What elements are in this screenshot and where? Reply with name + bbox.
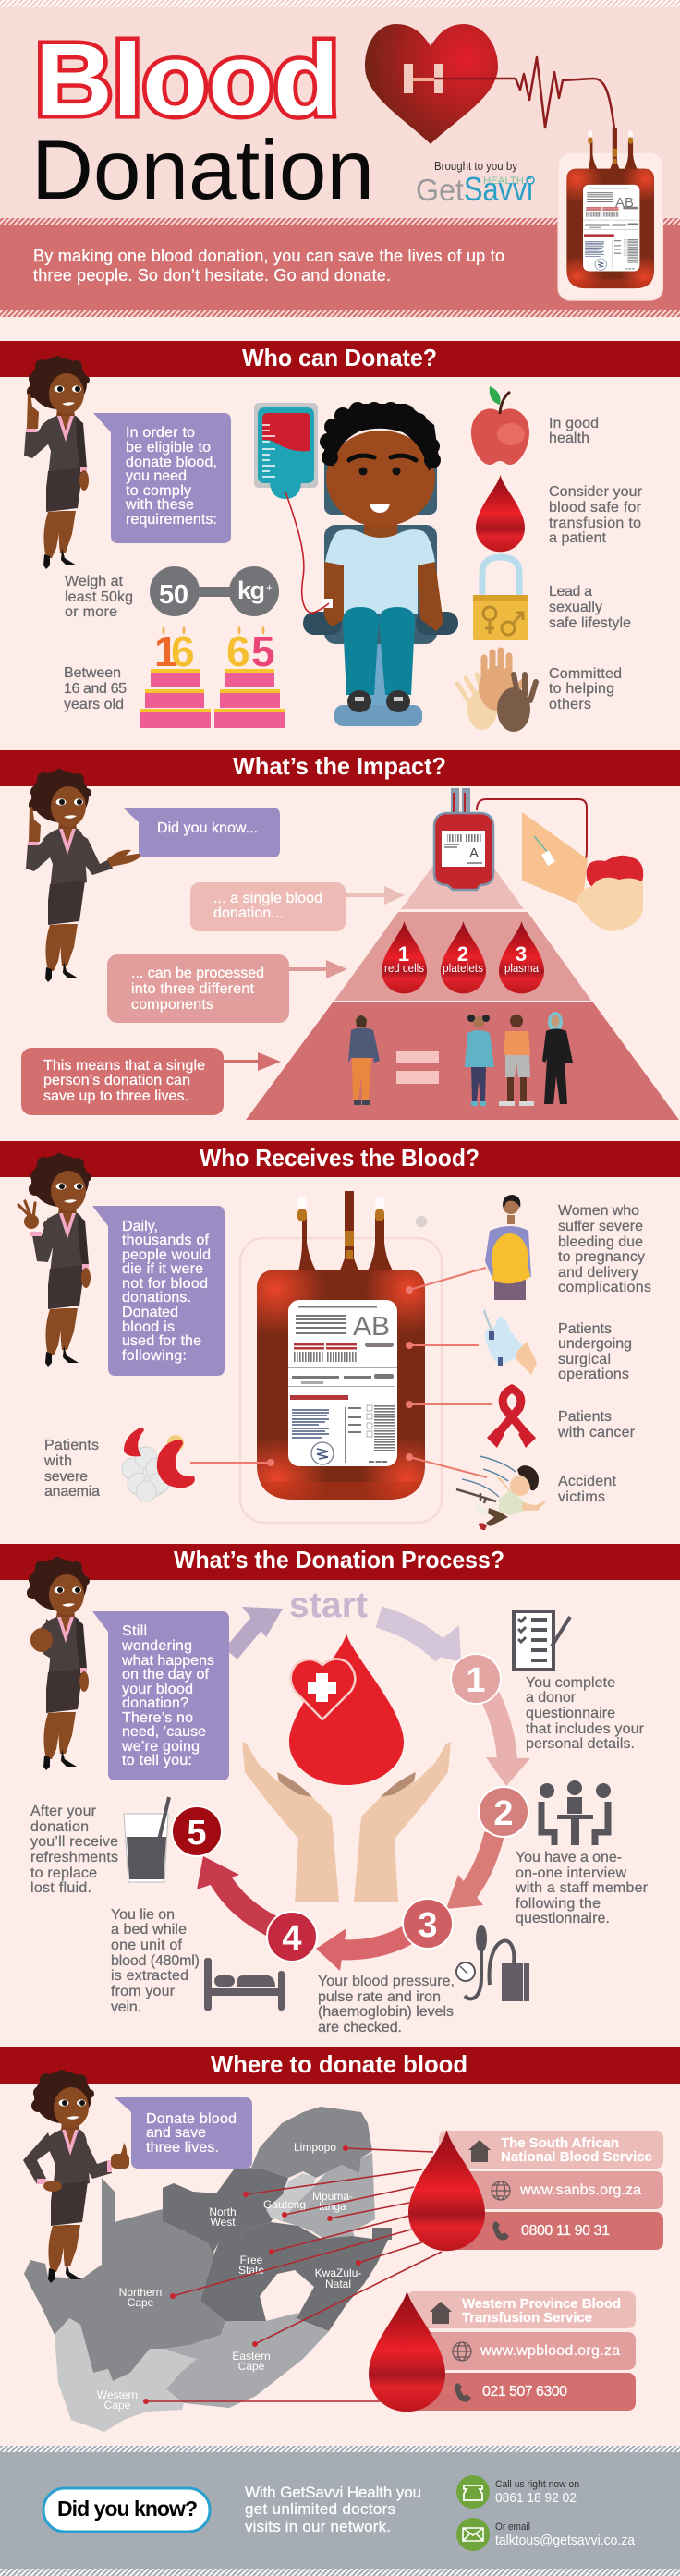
region labels: Cape (104, 2399, 131, 2412)
icon: cancer ribbon (487, 1389, 536, 1448)
text: You have a one- (516, 1850, 622, 1865)
step 4: 4 (282, 1919, 302, 1958)
speech bubble: There’s no (122, 1710, 193, 1726)
text (318, 1974, 455, 2035)
speech bubble: what happens (121, 1653, 214, 1669)
section: where to donate blood (0, 2047, 680, 2432)
arm and hand squeezing heart (522, 812, 643, 931)
text: pregnancy: bleeding due (558, 1234, 643, 1250)
footer message: visits in our network. (245, 2518, 391, 2535)
text: anaemia (43, 1438, 100, 1500)
header panel (0, 0, 680, 317)
callout: three components: components (131, 997, 213, 1013)
step 2: 2 (493, 1794, 514, 1833)
blood bag type A (434, 788, 587, 890)
step 3: 3 (418, 1906, 438, 1945)
service name: The South African (501, 2135, 619, 2151)
text: questionnaire (526, 1706, 615, 1721)
drop: red cells: 1 (398, 942, 409, 966)
drop: red cells: red cells (384, 961, 424, 975)
icon: interview (540, 1780, 611, 1845)
text: weight requirement: least 50kg (65, 589, 133, 605)
step 5: 5 (187, 1814, 207, 1853)
text: refreshments (30, 1850, 118, 1865)
seated donor (285, 402, 458, 726)
region labels: Northern (119, 2286, 162, 2299)
footer message (245, 2484, 421, 2535)
component drops (382, 921, 544, 993)
speech bubble: donate blood, (126, 455, 217, 470)
text: from your (111, 1984, 176, 1999)
text: pregnancy: and delivery (558, 1265, 638, 1281)
speech bubble: Still (122, 1623, 147, 1639)
presenter character making OK sign (18, 1153, 91, 1367)
speech bubble: following: (122, 1348, 187, 1364)
icon: globe (492, 2181, 510, 2200)
text: accident: victims (558, 1489, 605, 1505)
heading banner (0, 1544, 680, 1580)
arrow: to step 5 (197, 1856, 273, 1926)
speech bubble (92, 1206, 225, 1376)
drop: platelets (441, 921, 486, 993)
footer message: With GetSavvi Health you (245, 2484, 421, 2501)
heading banner: What’s the Impact? (233, 752, 446, 780)
contact: phone (456, 2475, 579, 2509)
central blood drop with heart (289, 1634, 404, 1785)
footer panel (0, 2446, 680, 2576)
presenter character with open hand (26, 769, 143, 982)
text: you’ll receive (30, 1834, 118, 1850)
connector lines (190, 1268, 492, 1477)
blood bag illustration: AB (615, 195, 634, 211)
speech bubble: and save (146, 2125, 206, 2141)
blood bag illustration (550, 128, 669, 300)
text: helping others (549, 666, 622, 712)
service name: Western Province Blood (462, 2296, 621, 2312)
icon: dumbbell 50 kg: kg (237, 577, 265, 604)
speech bubble: used for the (122, 1333, 201, 1349)
region: Northern Cape (24, 2178, 225, 2381)
text: safe lifestyle (549, 584, 631, 631)
arrow: to step 2 (486, 1695, 530, 1786)
speech bubble: to comply (126, 483, 191, 499)
drop: plasma: plasma (504, 961, 540, 975)
three recipient figures (465, 1012, 573, 1106)
text: pulse rate and iron (318, 1989, 441, 2005)
region labels: Cape (128, 2296, 154, 2309)
region labels: State (238, 2264, 264, 2277)
icon: birthday cakes 16 and 65: 6 (171, 627, 195, 675)
drop: red cells (382, 921, 427, 993)
region labels: Free (240, 2254, 263, 2266)
region labels: Limpopo (294, 2141, 336, 2154)
text: age requirement (64, 665, 127, 712)
icon: birthday cakes 16 and 65: 1 (154, 627, 178, 675)
drop: plasma: 3 (516, 942, 527, 966)
step 2 (479, 1780, 649, 1926)
blood drop: WP (369, 2290, 445, 2412)
sponsor logo: Brought to you by (434, 159, 517, 173)
speech bubble: people would (122, 1247, 211, 1263)
region labels: Natal (325, 2278, 351, 2290)
callout: three lives: save up to three lives. (43, 1088, 188, 1104)
icon: dumbbell 50 kg: 50 (159, 580, 188, 610)
text: safe lifestyle: Lead a (549, 584, 592, 600)
contact: email: Or email (495, 2521, 530, 2533)
speech bubble: thousands of (122, 1233, 210, 1248)
callout: three lives: This means that a single (43, 1058, 205, 1074)
region labels: Western (97, 2388, 138, 2401)
icon: phone (455, 2383, 471, 2402)
intro text (33, 247, 504, 285)
region labels: langa (319, 2200, 346, 2213)
text: pregnancy: Women who (558, 1203, 639, 1219)
icon: dumbbell 50 kg: + (266, 581, 273, 594)
text: with a staff member (515, 1880, 649, 1896)
arrow: to step 3 (446, 1834, 494, 1909)
region labels: Eastern (232, 2350, 271, 2363)
speech bubble: wondering (121, 1638, 192, 1654)
step 1 (451, 1611, 645, 1752)
icon: checklist (514, 1611, 570, 1670)
icon: globe (453, 2342, 471, 2361)
contact: phone: 0861 18 92 02 (495, 2490, 577, 2506)
text: age requirement: Between (64, 665, 121, 681)
text: safe blood: Consider your (549, 484, 643, 500)
arrow: to step 4 (316, 1928, 411, 1971)
start label: start (289, 1586, 368, 1625)
text: are checked. (318, 2020, 402, 2035)
icon: apple (471, 386, 529, 465)
speech bubble: not for blood (122, 1276, 208, 1292)
text: a bed while (111, 1922, 187, 1938)
callout: single donation: ... a single blood (213, 891, 322, 906)
contact: phone: Call us right now on (495, 2479, 579, 2490)
region: Mpumalanga (282, 2153, 375, 2238)
text: following the (516, 1896, 601, 1912)
callout: single donation: donation... (213, 905, 284, 921)
speech bubble: need, ’cause (122, 1724, 206, 1740)
text (526, 1675, 645, 1752)
icon: birthday cakes 16 and 65: 5 (251, 627, 275, 675)
text: vein. (111, 1999, 141, 2015)
text: pregnancy: complications (558, 1280, 651, 1295)
text: a donor (526, 1690, 577, 1706)
heading banner: What’s the Donation Process? (174, 1546, 504, 1574)
icon: helping hands (457, 650, 536, 732)
speech bubble: three lives. (146, 2140, 219, 2156)
icon: bed (204, 1958, 285, 2011)
text: surgery: surgical (558, 1352, 611, 1367)
speech bubble: Donated (122, 1305, 178, 1320)
region: KwaZulu-Natal (295, 2236, 388, 2331)
region: Swaziland (372, 2228, 392, 2240)
text: that includes your (526, 1721, 645, 1737)
speech bubble (93, 413, 231, 543)
callout: three components (107, 954, 347, 1023)
speech bubble: with these (125, 497, 194, 513)
text: weight requirement (65, 574, 133, 620)
icon: falling accident victim (456, 1456, 545, 1530)
callout: three components: into three different (131, 981, 255, 997)
service name (462, 2296, 621, 2326)
contact: email (456, 2518, 636, 2551)
phone number: 021 507 6300 (482, 2384, 567, 2400)
heading banner (0, 750, 680, 786)
text: age requirement: 16 and 65 (64, 681, 127, 697)
text: pregnancy: suffer severe (558, 1219, 643, 1234)
speech bubble: be eligible to (126, 440, 211, 456)
heading banner: Who Receives the Blood? (200, 1144, 480, 1172)
text: After your (30, 1804, 97, 1819)
icon: glass of water (124, 1797, 169, 1882)
text: in good health: In good (549, 416, 599, 431)
step 4 (111, 1907, 317, 2015)
speech bubble (115, 2097, 252, 2169)
did you know pill: Did you know? (57, 2497, 198, 2521)
text: in good health (549, 416, 599, 446)
blood drop: SANBS (408, 2130, 485, 2251)
region labels: KwaZulu- (315, 2266, 361, 2279)
icon: surgical glove with scalpel (484, 1310, 537, 1375)
text: age requirement: years old (64, 697, 124, 712)
text: Your blood pressure, (318, 1974, 455, 1989)
callout: three lives (21, 1048, 281, 1115)
text: safe blood: transfusion to (549, 516, 641, 531)
section: what's the impact (0, 750, 680, 1120)
presenter character with thumbs up (23, 2070, 129, 2283)
heading banner (0, 1141, 680, 1177)
text: pregnancy: to pregnancy (558, 1249, 645, 1265)
title: Blood: Blood (35, 23, 339, 137)
text (30, 1804, 118, 1896)
text: cancer (557, 1409, 636, 1440)
icon: padlock with gender symbols (473, 557, 528, 640)
sponsor logo: Get (416, 173, 464, 207)
speech bubble: donation? (122, 1695, 188, 1711)
text: personal details. (526, 1736, 635, 1752)
text: lost fluid. (30, 1880, 91, 1896)
text: anaemia: severe (44, 1469, 88, 1485)
text: helping others: Committed (549, 666, 622, 682)
text: questionnaire. (516, 1911, 610, 1926)
speech bubble: we’re going (121, 1739, 200, 1755)
callout: three components: ... can be processed (131, 966, 264, 981)
presenter character pointing forward (27, 1557, 90, 1770)
equals sign (396, 1051, 439, 1084)
section: who can donate (0, 341, 680, 732)
requirement list right (457, 386, 643, 732)
speech bubble: requirements: (126, 512, 217, 528)
text: helping others: to helping (549, 681, 614, 697)
text: anaemia: Patients (44, 1438, 99, 1453)
text: (haemoglobin) levels (318, 2004, 454, 2020)
section: donation process (0, 1544, 680, 2035)
text (515, 1850, 649, 1926)
text: safe lifestyle: safe lifestyle (549, 615, 631, 631)
icon: pregnant woman (485, 1195, 531, 1300)
text: to replace (30, 1865, 97, 1881)
step 5 (30, 1797, 222, 1896)
icon: dumbbell 50 kg (150, 566, 279, 616)
region: Limpopo (232, 2107, 372, 2178)
text: anaemia: anaemia (44, 1484, 100, 1500)
process arrows (197, 1607, 530, 1971)
drop: plasma (499, 921, 544, 993)
speech bubble: Did you know... (157, 820, 258, 836)
icon: blood drop (476, 475, 525, 552)
region labels: North (209, 2205, 237, 2218)
heading banner: Where to donate blood (211, 2050, 468, 2078)
text: safe blood: blood safe for (549, 500, 642, 516)
speech bubble: Daily, (122, 1219, 158, 1234)
arrow: start (231, 1607, 283, 1654)
region: North West (163, 2169, 288, 2254)
blood bag type A: A (469, 845, 479, 861)
region: Gauteng (266, 2173, 316, 2221)
service name: National Blood Service (501, 2149, 652, 2165)
text: pregnancy (558, 1203, 651, 1295)
text: blood (480ml) (111, 1953, 200, 1969)
section: who receives the blood (0, 1141, 680, 1530)
service contact card: SANBS (439, 2131, 663, 2250)
callout: single donation (190, 882, 405, 931)
large blood bag with label: AB (353, 1312, 390, 1342)
text: You lie on (111, 1907, 175, 1923)
did you know pill (43, 2488, 210, 2532)
one donor figure (348, 1015, 380, 1105)
drop: platelets: platelets (443, 961, 483, 975)
text: weight requirement: Weigh at (65, 574, 124, 589)
region: Eastern Cape (164, 2313, 329, 2408)
text: surgery: undergoing (558, 1336, 632, 1352)
title: Donation: Donation (31, 124, 374, 217)
intro text: By making one blood donation, you can save the lives of up to (33, 247, 504, 265)
text: helping others: others (549, 697, 591, 712)
text: surgery (558, 1321, 632, 1382)
icon: house (468, 2140, 491, 2162)
website: www.wpblood.org.za (480, 2343, 620, 2359)
sponsor logo: Savvi (464, 170, 533, 208)
speech bubble: donations. (122, 1290, 191, 1306)
text: is extracted (111, 1968, 188, 1984)
footer message: get unlimited doctors (245, 2500, 395, 2518)
speech bubble: you need (126, 468, 187, 484)
speech bubble (92, 1611, 229, 1780)
text: cancer: with cancer (557, 1425, 636, 1440)
text: surgery: Patients (558, 1321, 612, 1337)
region: Western Cape (55, 2318, 197, 2432)
phone number: 0800 11 90 31 (521, 2223, 610, 2239)
icon: birthday cakes 16 and 65: 6 (226, 627, 250, 675)
text: surgery: operations (558, 1367, 629, 1382)
region labels: Mpuma- (312, 2190, 353, 2203)
region: Free State (200, 2222, 322, 2321)
speech bubble: your blood (122, 1682, 193, 1697)
heading banner: Who can Donate? (242, 344, 437, 371)
text: You complete (526, 1675, 615, 1691)
large blood bag with label (225, 1191, 453, 1523)
contact: email: talktous@getsavvi.co.za (495, 2533, 636, 2548)
icon: house (430, 2302, 452, 2324)
service name (501, 2135, 652, 2165)
arrow: to step 1 (379, 1617, 461, 1662)
speech bubble: to tell you: (122, 1753, 192, 1768)
presenter character pointing up (24, 356, 90, 569)
heading banner (0, 341, 680, 377)
pyramid (246, 825, 679, 1120)
callout: three lives: person’s donation can (43, 1073, 190, 1088)
region labels: Gauteng (263, 2198, 306, 2211)
icon: phone (492, 2221, 509, 2241)
map connector lines (143, 2145, 442, 2404)
text (111, 1907, 200, 2015)
text: on-one interview (516, 1865, 626, 1881)
map of South Africa (24, 2107, 392, 2432)
icon: blood pressure cuff (456, 1925, 529, 2001)
speech bubble: on the day of (122, 1667, 210, 1683)
text: accident (558, 1474, 617, 1505)
text: accident: Accident (558, 1474, 617, 1489)
IV blood bag (254, 403, 318, 499)
text: in good health: health (549, 431, 589, 446)
intro text: three people. So don’t hesitate. Go and donate. (33, 266, 391, 285)
website: www.sanbs.org.za (519, 2182, 641, 2198)
speech bubble: In order to (126, 425, 195, 441)
text: donation (30, 1819, 89, 1835)
region labels (97, 2141, 361, 2412)
text: safe lifestyle: sexually (549, 600, 602, 615)
sponsor logo: HEALTH (483, 176, 524, 187)
speech bubble (123, 808, 280, 857)
cupped hands (242, 1742, 451, 1902)
service contact card: WP blood (407, 2291, 636, 2411)
step 3 (318, 1899, 529, 2035)
text: safe blood (549, 484, 643, 546)
service name: Transfusion Service (462, 2310, 592, 2326)
icon: blood cells anaemia (122, 1428, 195, 1501)
text: safe blood: a patient (549, 530, 607, 546)
text: one unit of (111, 1938, 183, 1953)
region labels: West (210, 2216, 236, 2229)
speech bubble: die if it were (122, 1261, 203, 1277)
heart with tube and heartbeat line (365, 24, 614, 144)
speech bubble: Donate blood (146, 2111, 237, 2127)
speech bubble: blood is (122, 1319, 175, 1335)
heading banner (0, 2047, 680, 2084)
drop: platelets: 2 (457, 942, 468, 966)
text: weight requirement: or more (65, 604, 117, 620)
step 1: 1 (466, 1661, 486, 1700)
text: cancer: Patients (558, 1409, 612, 1425)
text: anaemia: with (43, 1453, 72, 1469)
sponsor logo (416, 159, 534, 208)
icon: birthday cakes 16 and 65 (140, 626, 285, 728)
region labels: Cape (238, 2360, 265, 2373)
